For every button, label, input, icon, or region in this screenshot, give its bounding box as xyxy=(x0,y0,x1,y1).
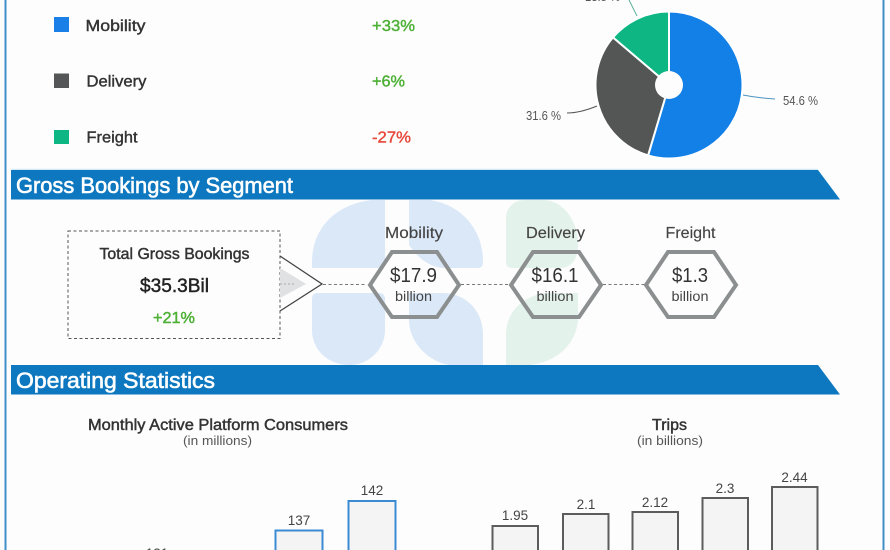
bar: 137: 137 xyxy=(288,513,310,528)
connector: Delivery to Freight xyxy=(603,284,644,286)
legend row: Mobility: Mobility xyxy=(86,18,146,35)
bar: 2.12 xyxy=(632,495,678,550)
bar: 137 xyxy=(276,513,322,550)
hexagon: Delivery: billion xyxy=(536,288,574,304)
legend row: Mobility xyxy=(54,17,415,35)
hexagon: Delivery xyxy=(511,225,601,317)
chart title: (in billions) xyxy=(637,433,703,448)
bar: 1.95 xyxy=(492,508,538,550)
section heading: Operating Statistics: Operating Statistics xyxy=(16,368,215,393)
bar: 2.1: 2.1 xyxy=(577,497,595,512)
legend row: Freight: -27% xyxy=(372,130,411,146)
bar: 2.3: 2.3 xyxy=(716,481,734,496)
legend row: Delivery: +6% xyxy=(372,74,405,90)
chart title xyxy=(637,417,703,448)
bar: 1.95: 1.95 xyxy=(502,508,528,523)
watermark logo xyxy=(312,200,578,365)
chart title: (in millions) xyxy=(183,433,252,448)
total gross bookings box xyxy=(68,231,280,338)
bar: 2.44 xyxy=(772,470,818,550)
section heading: Operating Statistics xyxy=(11,365,840,394)
legend row: Freight xyxy=(54,130,411,146)
hexagon: Freight: Freight xyxy=(666,225,716,242)
legend: revenue growth by segment xyxy=(54,17,415,146)
chart title: Trips xyxy=(652,417,687,434)
hexagon: Mobility xyxy=(370,225,459,317)
pie chart: segment share: 54.6 % xyxy=(783,94,818,108)
hexagon: Freight: $1.3 xyxy=(672,265,708,287)
bar chart: Monthly Active Platform Consumers xyxy=(88,417,396,550)
legend row: Mobility: +33% xyxy=(372,18,415,35)
legend row: Freight: Freight xyxy=(86,130,138,146)
hexagon: Delivery: $16.1 xyxy=(532,265,578,287)
bar: 142 xyxy=(348,483,396,550)
hexagon: Mobility: Mobility xyxy=(385,225,443,242)
legend row: Delivery xyxy=(54,74,405,90)
hexagon: Freight: billion xyxy=(672,288,708,304)
legend row: Delivery: Delivery xyxy=(86,74,146,90)
connector: Mobility to Delivery xyxy=(461,284,509,286)
bar: 2.44: 2.44 xyxy=(781,470,808,485)
pie chart: segment share xyxy=(526,0,818,158)
bar: 2.12: 2.12 xyxy=(642,495,668,510)
bar: 2.3 xyxy=(702,481,748,550)
bar: 2.1 xyxy=(563,497,608,550)
section heading: Gross Bookings by Segment: Gross Bookings by Segment xyxy=(16,173,293,198)
total gross bookings box: +21% xyxy=(153,310,195,327)
arrow connector from total box xyxy=(280,256,367,311)
hexagon: Mobility: billion xyxy=(395,288,432,304)
bar chart: Trips xyxy=(492,417,818,550)
chart title xyxy=(88,417,348,448)
total gross bookings box: $35.3Bil xyxy=(140,276,209,297)
pie chart: segment share: 31.6 % xyxy=(526,109,561,123)
hexagon: Freight xyxy=(646,225,736,317)
chart title: Monthly Active Platform Consumers xyxy=(88,417,348,434)
hexagon: Mobility: $17.9 xyxy=(390,265,437,287)
hexagon: Delivery: Delivery xyxy=(526,225,585,242)
total gross bookings box: Total Gross Bookings xyxy=(100,246,250,263)
bar: 142: 142 xyxy=(361,483,383,498)
section heading: Gross Bookings by Segment xyxy=(11,170,840,200)
